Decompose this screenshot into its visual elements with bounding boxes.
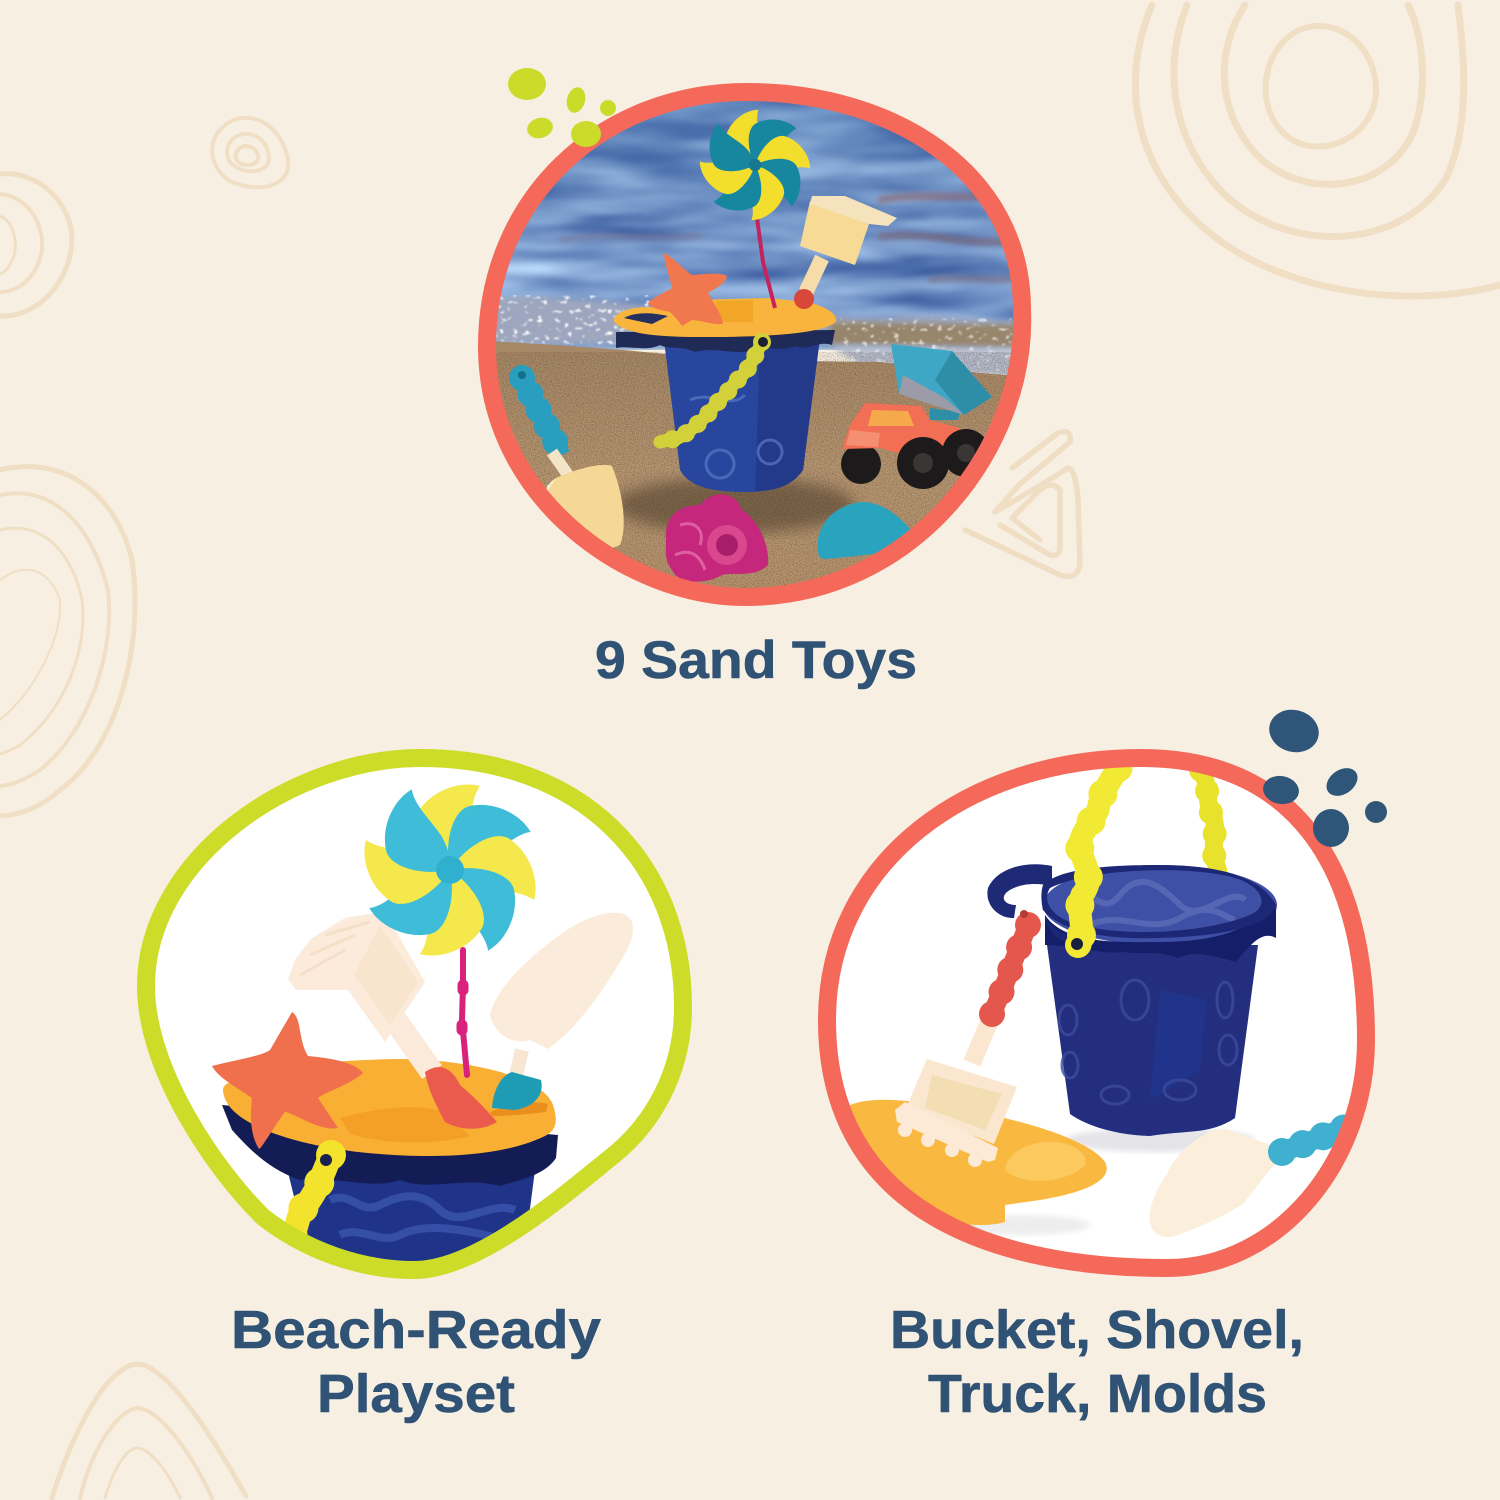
scoop: [1150, 1129, 1288, 1237]
panel: beach-ready playset photo: [146, 758, 683, 1270]
heading: Beach-Ready Playset: Beach-Ready: [231, 1300, 601, 1360]
yellow handle: [290, 1155, 331, 1240]
bucket inside: [1043, 865, 1277, 945]
orange lid: [614, 298, 836, 337]
water: [496, 101, 1014, 350]
panel: 9 sand toys photo: [470, 80, 1040, 610]
pink stick: [757, 218, 775, 308]
heading: Bucket, Shovel, Truck, Molds: Bucket, Shovel,: [890, 1300, 1304, 1360]
red handle: [992, 925, 1028, 1014]
crab mold: [666, 494, 768, 582]
rake head: [895, 1059, 1017, 1167]
bucket: [288, 1174, 534, 1261]
pink stick: [462, 950, 467, 1075]
bucket rim scallop: [616, 330, 835, 352]
orange lid: [848, 1100, 1107, 1225]
decorative triangle spiral: [965, 432, 1080, 577]
coral ring: [487, 92, 1022, 597]
sand: [496, 342, 1007, 588]
left yellow handle: [1080, 768, 1118, 945]
teal shovel: [518, 371, 624, 550]
truck: [841, 344, 992, 489]
shadows: [1065, 1128, 1255, 1152]
bucket body: [1047, 945, 1258, 1136]
bucket body: [664, 338, 820, 492]
whale mold: [818, 502, 910, 559]
sand grain: [496, 352, 1011, 588]
coral ring: [827, 758, 1366, 1268]
pinwheel: [364, 784, 536, 956]
heading: Bucket, Shovel, Truck, Molds: Truck, Molds: [928, 1364, 1267, 1424]
heading: 9 Sand Toys: 9 Sand Toys: [595, 631, 917, 690]
lime ring: [146, 758, 683, 1270]
starfish: [212, 1012, 363, 1149]
orange lid: [223, 1059, 556, 1156]
shoreline foam: [480, 297, 1030, 346]
bucket handle ring: [987, 864, 1052, 918]
scoop toy: [490, 913, 633, 1110]
starfish: [648, 253, 727, 326]
bucket rim: [1045, 905, 1276, 962]
rake toy: [288, 912, 497, 1129]
heading: Beach-Ready Playset: [231, 1300, 601, 1424]
pinwheel: [698, 108, 812, 222]
navy dots: [1261, 704, 1387, 847]
panel: bucket shovel truck molds photo: [827, 758, 1366, 1268]
lime dots: [508, 68, 616, 147]
heading: Bucket, Shovel, Truck, Molds: [890, 1300, 1304, 1424]
teal handle: [1282, 1128, 1345, 1152]
right yellow handle: [1201, 770, 1218, 870]
heading: Beach-Ready Playset: Playset: [317, 1364, 515, 1424]
sieve: [794, 196, 897, 309]
rake shaft: [972, 1020, 990, 1063]
yellow handle: [660, 342, 762, 442]
